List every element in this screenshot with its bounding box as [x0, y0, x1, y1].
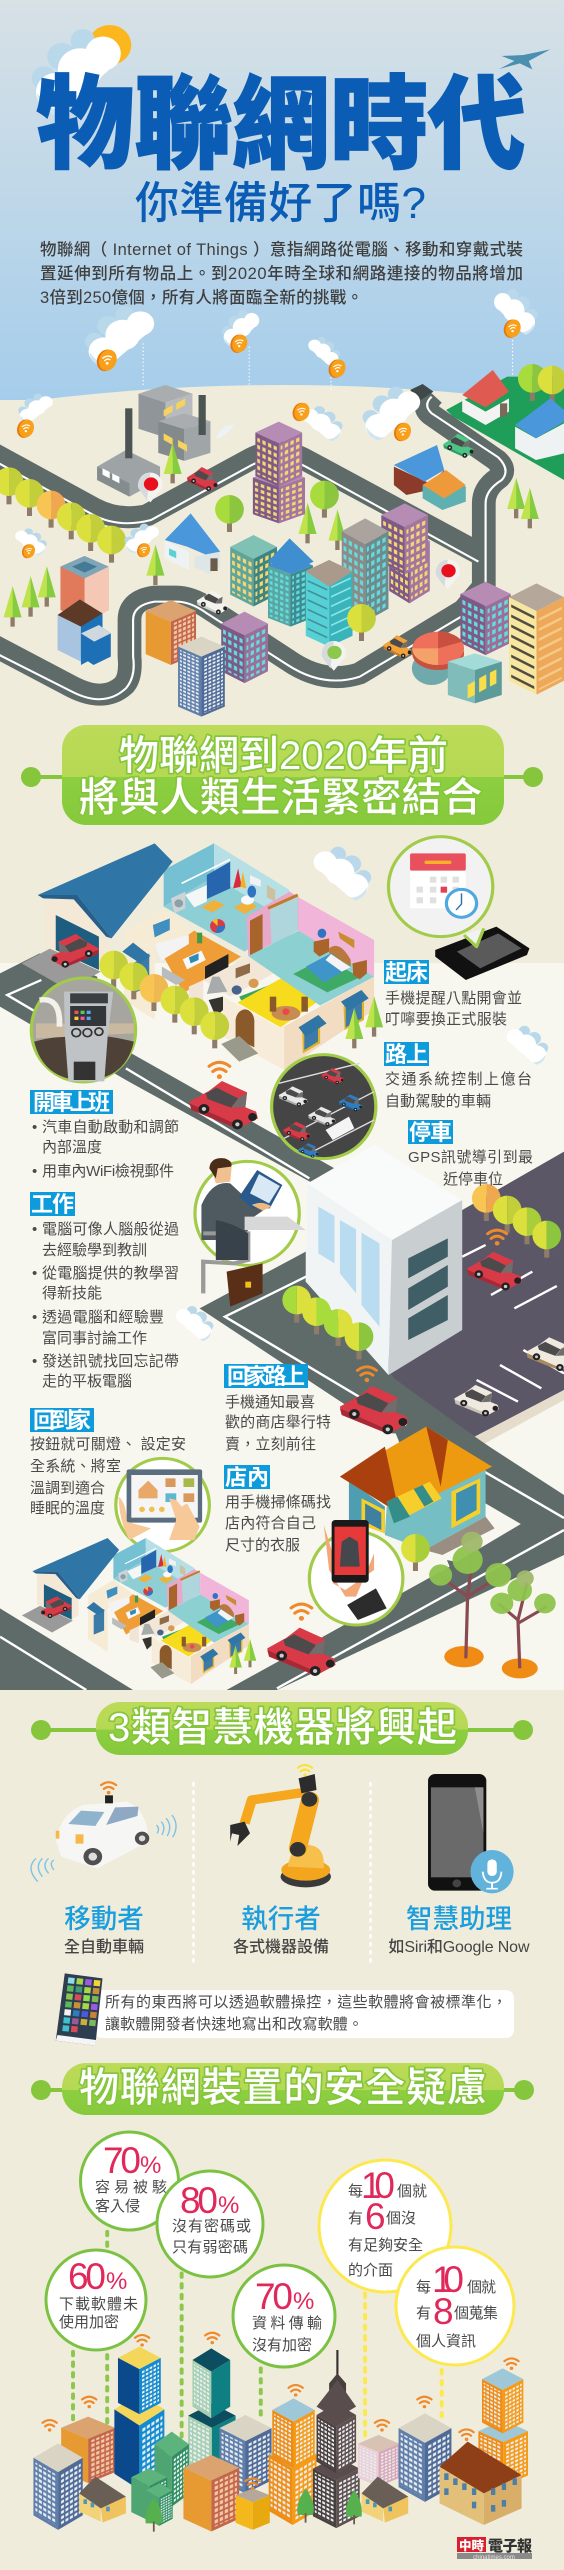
wifi car on driveway road — [190, 1062, 258, 1129]
heading: movers: 全自動車輛 — [64, 1938, 144, 1956]
bubble: 80% weak passwords: 只有弱密碼 — [172, 2239, 248, 2256]
text: parking: 近停車位 — [443, 1171, 503, 1188]
callout: software standardisation: 讓軟體開發者快速地寫出和改寫軟體。 — [105, 2015, 363, 2033]
banner: section 3 heading — [31, 1702, 533, 1755]
text: work list — [32, 1221, 179, 1390]
parking lot — [378, 1152, 564, 1444]
bubble: 60% no encryption: % — [106, 2268, 127, 2295]
text: work list: • — [32, 1265, 37, 1282]
illustration: small home — [22, 1538, 249, 1684]
title: 物聯網時代 — [36, 68, 526, 182]
roads — [0, 953, 564, 1690]
text: work list: 去經驗學到教訓 — [42, 1241, 147, 1259]
bubble: 6 of 10 insecure interface: 每 — [348, 2183, 363, 2200]
text: driving list: • — [32, 1163, 37, 1180]
text: way home: 手機通知最喜 — [225, 1394, 315, 1411]
bubble: 6 of 10 insecure interface: 10 — [361, 2165, 395, 2206]
callout: software standardisation: 所有的東西將可以透過軟體操控，這些軟體將會被標準化， — [105, 1993, 507, 2011]
text: driving list: 內部溫度 — [42, 1139, 102, 1156]
section 3 background — [0, 1690, 564, 2570]
icon: car interior circle — [31, 978, 136, 1082]
text: work list: • — [32, 1353, 37, 1370]
bubble: 70% easily hacked — [80, 2132, 178, 2230]
intro paragraph: 物聯網（ Internet of Things ）意指網路從電腦、移動和穿戴式裝 — [40, 240, 523, 259]
label: 路上: 路上 — [385, 1042, 428, 1067]
text: back home: 睡眠的溫度 — [30, 1500, 105, 1517]
bubble: 80% weak passwords: 沒有密碼或 — [172, 2218, 251, 2235]
text: back home: 全系統、將室 — [30, 1458, 121, 1475]
text: work list: 走的平板電腦 — [42, 1373, 132, 1390]
label: 回家路上: 回家路上 — [227, 1364, 305, 1389]
text: work list: 得新技能 — [42, 1285, 102, 1302]
text: in store — [225, 1494, 331, 1554]
bubble: 60% no encryption — [46, 2250, 146, 2350]
bubble: 6 of 10 insecure interface: 有足夠安全 — [348, 2237, 423, 2254]
dotted connector lines — [73, 2232, 442, 2437]
text: work list: • — [32, 1221, 37, 1238]
bubble: 8 of 10 collect personal data — [396, 2247, 514, 2365]
bubble: 8 of 10 collect personal data: 個蒐集 — [454, 2305, 498, 2322]
label: 停車: 停車 — [409, 1120, 452, 1145]
skyline buildings — [33, 2347, 528, 2531]
parked cars — [454, 1252, 564, 1416]
intro paragraph — [40, 240, 523, 307]
text: on road — [385, 1070, 532, 1110]
heading: movers: 移動者 — [64, 1904, 144, 1934]
bubble: 8 of 10 collect personal data: 個就 — [467, 2279, 496, 2296]
label: 開車上班: 開車上班 — [33, 1090, 110, 1115]
text: in store: 用手機掃條碼找 — [225, 1494, 331, 1511]
icon: tablet with apps — [56, 1973, 103, 2046]
icon: self-driving car — [31, 1782, 176, 1882]
text: back home: 溫調到適合 — [30, 1479, 105, 1497]
text: wake up: 手機提醒八點開會並 — [385, 990, 522, 1007]
logo: China Times: chinatimes.com — [473, 2555, 515, 2561]
text: in store: 店內符合自己 — [225, 1514, 316, 1532]
text: back home — [30, 1436, 186, 1517]
banner: section 2 heading — [21, 725, 543, 825]
label: 起床: 起床 — [385, 960, 428, 985]
icon: tablet in hand circle — [116, 1458, 209, 1552]
text: work list: 發送訊號找回忘記帶 — [42, 1353, 179, 1370]
heading: actuators — [233, 1904, 329, 1956]
icon: traffic circle — [272, 1055, 376, 1159]
label: 回到家: 回到家 — [33, 1408, 91, 1433]
bubble: 8 of 10 collect personal data: 個人資訊 — [416, 2333, 476, 2350]
bubble: 60% no encryption: 使用加密 — [59, 2314, 119, 2331]
bubble: 8 of 10 collect personal data: 8 — [433, 2291, 454, 2332]
text: driving list — [32, 1118, 179, 1180]
sun and title cloud — [32, 25, 131, 115]
bubble: 70% easily hacked: % — [140, 2152, 161, 2179]
bubble: 70% unencrypted transfer: % — [293, 2288, 314, 2315]
text: on road: 自動駕駛的車輛 — [385, 1093, 491, 1110]
bubble: 80% weak passwords: 80 — [180, 2180, 218, 2221]
bubble: 6 of 10 insecure interface: 個沒 — [386, 2210, 416, 2227]
banner: section 4 heading — [31, 2063, 534, 2115]
bubble: 70% easily hacked: 容易被駭 — [95, 2179, 167, 2196]
bubble: 6 of 10 insecure interface: 的介面 — [348, 2262, 393, 2279]
heading: smart assistants — [388, 1904, 530, 1956]
row of trees by the house — [99, 951, 383, 1048]
sky background — [0, 0, 564, 400]
dotted dividers — [194, 1783, 370, 1962]
wifi car lower — [267, 1604, 336, 1676]
illustration: isometric home — [22, 843, 374, 1070]
road network — [0, 384, 506, 699]
bubble: 6 of 10 insecure interface: 有 — [348, 2210, 363, 2227]
intro paragraph: 置延伸到所有物品上。到2020年時全球和網路連接的物品將增加 — [40, 264, 523, 283]
logo: China Times: 電子報 — [488, 2537, 532, 2555]
low-rise apartments — [58, 556, 376, 665]
clouds with IoT tags on ground — [15, 387, 420, 560]
text: way home: 歡的商店舉行特 — [225, 1414, 331, 1431]
small home pines — [229, 1639, 256, 1674]
bubble: 70% easily hacked: 70 — [103, 2140, 141, 2181]
illustration: isometric smart city — [0, 364, 564, 717]
bubble: 6 of 10 insecure interface: 個就 — [397, 2183, 427, 2200]
text: way home: 賣，立刻前往 — [225, 1436, 316, 1453]
bubble: 80% weak passwords: % — [218, 2192, 239, 2219]
text: driving list: 用車內WiFi檢視郵件 — [42, 1163, 174, 1180]
text: parking: GPS訊號導引到最 — [408, 1149, 533, 1166]
icon: smartphone with microphone — [428, 1774, 514, 1893]
high-rise buildings — [146, 422, 564, 717]
banner: section 4 heading: 物聯網裝置的安全疑慮 — [79, 2066, 487, 2110]
clouds with IoT tags in the sky — [85, 289, 537, 390]
banner: section 2 heading: 物聯網到2020年前 — [119, 734, 448, 778]
logo: China Times: 中時 — [459, 2538, 485, 2553]
text: parking — [408, 1149, 533, 1188]
icon: calendar bubble and phone — [388, 837, 529, 980]
bubble: 70% unencrypted transfer: 沒有加密 — [252, 2337, 312, 2354]
bubble: 70% unencrypted transfer — [233, 2265, 335, 2367]
icon: robot arm — [230, 1765, 331, 1887]
tank and storage — [412, 632, 502, 703]
vehicles and pins — [197, 434, 474, 671]
bubble: 8 of 10 collect personal data: 每 — [416, 2279, 431, 2296]
text: wake up — [385, 990, 522, 1028]
bubble: 8 of 10 collect personal data: 有 — [416, 2305, 431, 2322]
text: on road: 交通系統控制上億台 — [385, 1070, 532, 1088]
callout: software standardisation — [94, 1990, 514, 2038]
icon: airplane — [499, 49, 550, 69]
icon: phone scanning circle — [309, 1520, 403, 1625]
bubble: 70% unencrypted transfer: 資料傳輸 — [252, 2315, 322, 2332]
icon: man at laptop circle — [195, 1158, 306, 1307]
logo: China Times — [457, 2537, 532, 2561]
heading: actuators: 執行者 — [241, 1904, 321, 1934]
factory — [97, 385, 234, 502]
text: back home: 按鈕就可關燈、 設定安 — [30, 1436, 186, 1453]
heading: smart assistants: 如Siri和Google Now — [388, 1938, 530, 1956]
text: work list: 透過電腦和經驗豐 — [42, 1309, 164, 1326]
text: work list: 電腦可像人腦般從過 — [42, 1221, 179, 1238]
office building — [282, 1145, 561, 1375]
bubble: 70% unencrypted transfer: 70 — [255, 2276, 293, 2317]
banner: section 3 heading: 3類智慧機器將興起 — [108, 1706, 457, 1750]
subtitle: 你準備好了嗎? — [135, 179, 426, 228]
intro paragraph: 3倍到250億個，所有人將面臨全新的挑戰。 — [40, 287, 363, 307]
shop — [340, 1427, 495, 1571]
label: 工作: 工作 — [31, 1192, 74, 1217]
wifi car on road — [340, 1367, 408, 1434]
heading: smart assistants: 智慧助理 — [406, 1904, 512, 1934]
bubble: 6 of 10 insecure interface: 6 — [365, 2196, 386, 2237]
text: way home — [225, 1394, 331, 1453]
cottages and mansion — [79, 2442, 522, 2532]
bubble: 6 of 10 insecure interface — [319, 2160, 451, 2292]
bubble: 60% no encryption: 60 — [68, 2256, 106, 2297]
text: work list: 從電腦提供的教學習 — [42, 1264, 179, 1282]
label: 店內: 店內 — [225, 1465, 269, 1490]
heading: movers — [64, 1904, 144, 1956]
trees bare right — [429, 1532, 556, 1678]
bubble: 70% easily hacked: 客入侵 — [95, 2198, 140, 2215]
text: in store: 尺寸的衣服 — [225, 1537, 300, 1554]
bubble: 60% no encryption: 下載軟體未 — [59, 2296, 138, 2313]
text: work list: • — [32, 1309, 37, 1326]
lawn and houses top right — [446, 364, 564, 480]
banner: section 2 heading: 將與人類生活緊密結合 — [79, 776, 482, 820]
wifi signals over buildings — [43, 2333, 519, 2489]
text: driving list: • — [32, 1119, 37, 1136]
text: work list: 富同事討論工作 — [42, 1329, 147, 1347]
illustration: daily life street map — [0, 953, 564, 1690]
small houses and shop — [4, 445, 539, 627]
text: driving list: 汽車自動啟動和調節 — [42, 1118, 179, 1136]
tree row left — [0, 467, 126, 563]
bubble: 8 of 10 collect personal data: 10 — [432, 2259, 464, 2300]
heading: actuators: 各式機器設備 — [233, 1937, 329, 1956]
bubble: 80% weak passwords — [157, 2171, 263, 2277]
clouds decoration — [176, 847, 548, 1341]
text: wake up: 叮嚀要換正式服裝 — [385, 1011, 507, 1028]
